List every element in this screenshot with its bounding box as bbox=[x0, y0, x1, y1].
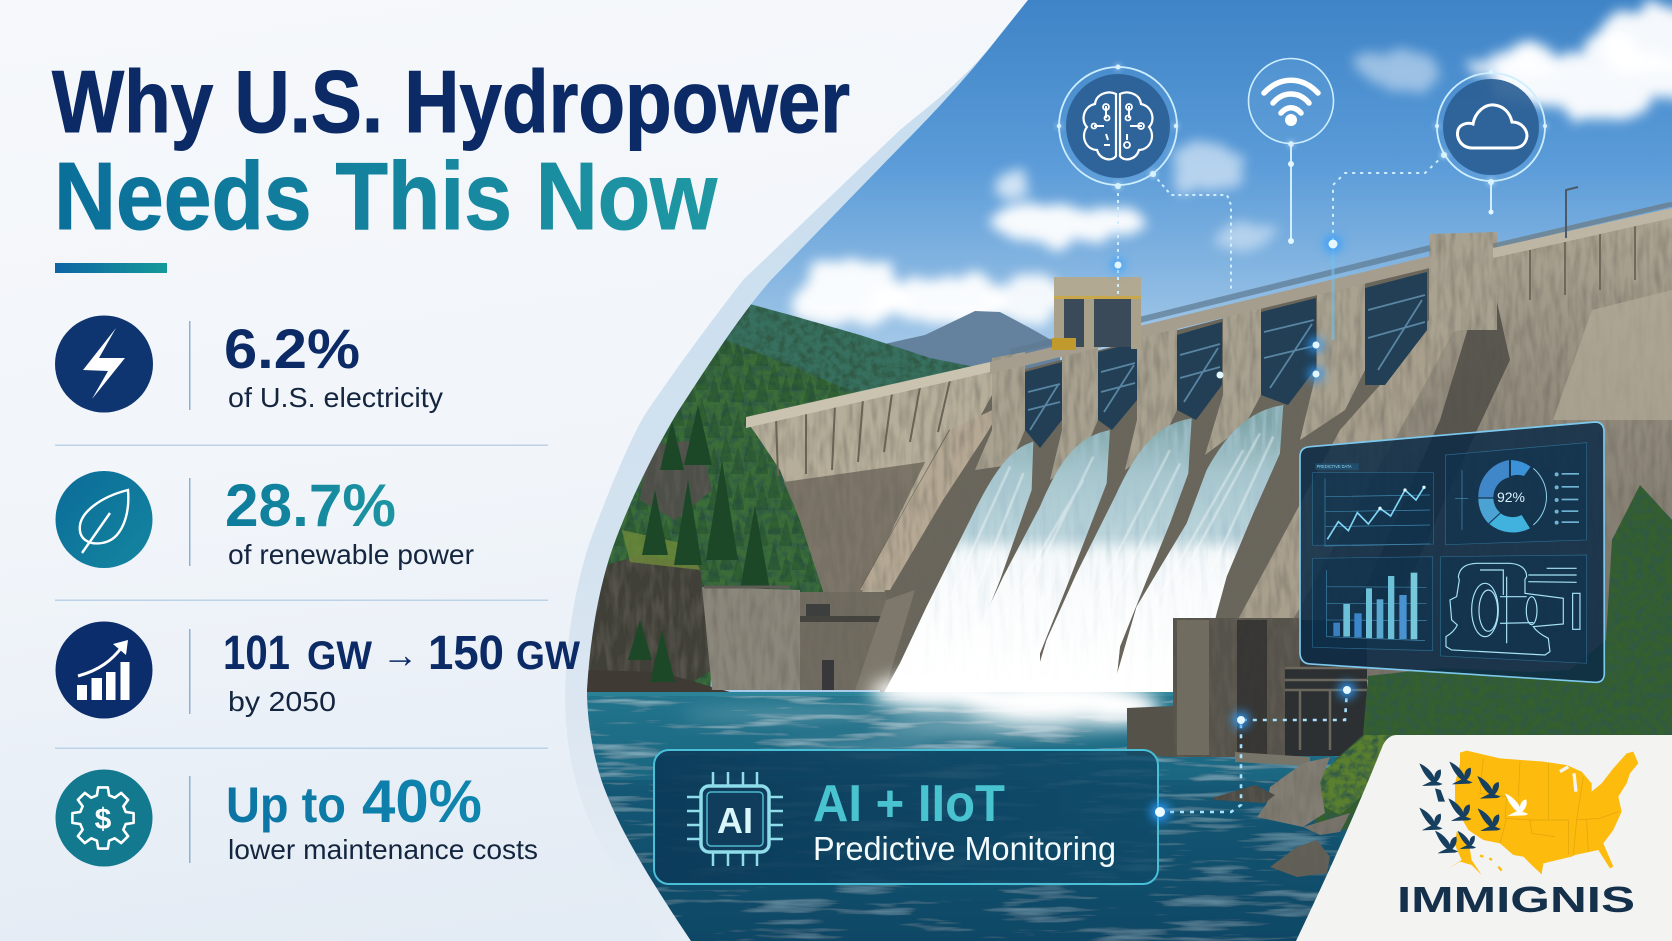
panel: AI + IIoT callout bbox=[654, 750, 1169, 884]
capacity figures: 150 bbox=[428, 627, 504, 680]
right lower structures bbox=[1127, 618, 1367, 766]
waterfall chutes bbox=[880, 405, 1283, 710]
HUD donut gauge: 92% bbox=[1497, 489, 1525, 505]
curved band behind photo bbox=[565, 0, 1672, 941]
gate tower bbox=[1052, 277, 1141, 350]
stat: electricity share bbox=[55, 316, 443, 413]
left dam wall bbox=[750, 372, 992, 592]
connector nodes bbox=[1114, 161, 1494, 724]
front forest hillside bbox=[607, 340, 854, 686]
accent bar bbox=[55, 263, 167, 273]
right forest bbox=[1312, 485, 1672, 830]
panel: HUD dashboard bbox=[1300, 422, 1604, 682]
icon: AI chip bbox=[687, 772, 783, 866]
cliff rocks bbox=[585, 440, 730, 696]
savings figure bbox=[226, 768, 482, 835]
water bbox=[580, 692, 1400, 941]
stat: maintenance savings: lower maintenance costs bbox=[228, 834, 538, 865]
capacity figures: GW bbox=[516, 634, 580, 678]
back forest hill bbox=[725, 304, 972, 392]
shore foliage bbox=[1320, 735, 1394, 815]
stat: capacity growth: by 2050 bbox=[228, 686, 336, 717]
lit buttress strip bbox=[860, 410, 992, 590]
gate steel lattice bbox=[1028, 295, 1425, 430]
water streaks bbox=[971, 432, 1274, 562]
title bbox=[52, 52, 850, 250]
waterfall foam bbox=[680, 674, 1160, 755]
savings figure: 40% bbox=[362, 768, 482, 835]
gate recesses bbox=[1025, 272, 1427, 448]
white water lower section bbox=[884, 538, 1242, 692]
connector node halos bbox=[1112, 236, 1355, 728]
callout node bbox=[1151, 803, 1169, 821]
icon: leaf bbox=[56, 471, 152, 568]
right wall shadow and lit buttress bbox=[1235, 226, 1672, 625]
HUD line chart bbox=[1313, 463, 1433, 546]
distant mountain bbox=[886, 311, 1060, 370]
birds bbox=[1419, 762, 1528, 853]
right dam wall bbox=[1294, 208, 1672, 680]
icon: gear with dollar: $ bbox=[95, 803, 112, 836]
logo wordmark: IMMIGNIS bbox=[1397, 879, 1635, 920]
stat: renewable share bbox=[56, 471, 474, 570]
panel: logo corner bbox=[1296, 735, 1672, 941]
conifer trees bbox=[628, 405, 770, 682]
capacity figures: 101 bbox=[223, 627, 290, 680]
panel: dam photo illustration bbox=[580, 0, 1672, 941]
savings figure: Up to bbox=[226, 777, 346, 833]
shore rocks bbox=[1212, 757, 1350, 877]
capacity figures: GW bbox=[307, 634, 372, 678]
icon: lightning bolt bbox=[55, 316, 153, 412]
left wall shadow bbox=[784, 462, 925, 600]
tree texture bbox=[608, 340, 847, 686]
HUD turbine schematic bbox=[1441, 555, 1587, 663]
capacity figures bbox=[223, 627, 580, 680]
stat: capacity growth bbox=[56, 622, 580, 718]
stat: renewable share: of renewable power bbox=[228, 539, 474, 570]
left powerhouse bbox=[702, 587, 915, 690]
icon: growth chart bbox=[56, 622, 152, 718]
stat: electricity share: 6.2% bbox=[224, 317, 360, 380]
icon: cloud hologram bbox=[1435, 70, 1547, 185]
clouds bbox=[788, 6, 1672, 329]
callout heading: AI + IIoT bbox=[813, 775, 1005, 833]
wall crest bbox=[746, 362, 990, 428]
dam deck and railing bbox=[990, 187, 1672, 374]
dam piers bbox=[975, 232, 1497, 480]
US map bbox=[1448, 751, 1638, 875]
hologram connector lines bbox=[1118, 144, 1491, 812]
sky bbox=[580, 0, 1672, 720]
capacity figures: → bbox=[382, 634, 418, 675]
stat: renewable share: 28.7% bbox=[225, 472, 396, 539]
HUD line chart: PREDICTIVE DATA bbox=[1317, 464, 1352, 469]
callout subheading: Predictive Monitoring bbox=[813, 830, 1116, 867]
title: Why U.S. Hydropower bbox=[52, 52, 850, 151]
icon: gear with dollar bbox=[56, 770, 152, 866]
logo artwork bbox=[1419, 751, 1638, 875]
icon: AI chip: AI bbox=[717, 800, 753, 841]
stat: electricity share: of U.S. electricity bbox=[228, 382, 443, 413]
icon: wifi hologram bbox=[1248, 58, 1334, 147]
title: Needs This Now bbox=[54, 143, 717, 250]
HUD bar chart bbox=[1313, 557, 1433, 651]
water ripples bbox=[580, 696, 1340, 786]
icon: brain hologram bbox=[1057, 64, 1178, 189]
concrete spillway body bbox=[880, 268, 1429, 692]
HUD donut gauge bbox=[1445, 443, 1587, 545]
left wall joints bbox=[776, 380, 950, 590]
stat: maintenance savings bbox=[56, 768, 538, 866]
